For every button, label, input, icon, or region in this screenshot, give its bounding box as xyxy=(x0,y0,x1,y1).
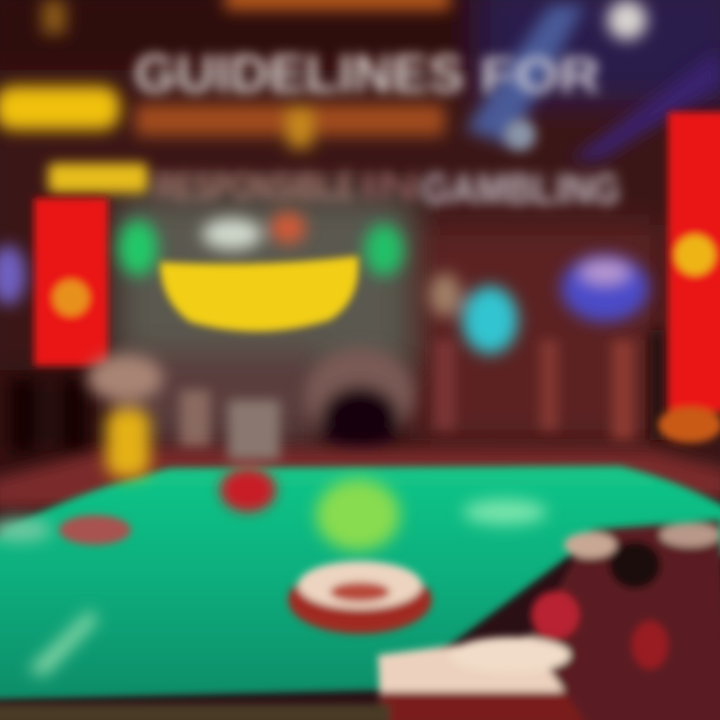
bottom front cards and chips xyxy=(0,520,720,720)
felt highlights xyxy=(0,479,547,676)
chips on felt xyxy=(59,515,432,634)
red banner left xyxy=(34,198,108,366)
subtitle text: GAMBLING xyxy=(422,165,620,214)
heading band xyxy=(135,104,445,148)
yellow label left xyxy=(0,86,120,130)
green table felt xyxy=(0,466,720,700)
title text xyxy=(134,44,600,151)
dark tunnel xyxy=(304,347,416,454)
figure and red chip xyxy=(220,400,280,512)
title text: GUIDELINES xyxy=(134,44,464,104)
central sign xyxy=(118,212,404,332)
top ceiling light strip xyxy=(42,0,720,160)
subtitle text: RESPONSIBLE xyxy=(155,165,355,209)
background wall xyxy=(0,0,720,480)
wall columns xyxy=(12,330,664,450)
title text: FOR xyxy=(480,47,600,103)
round lights on right xyxy=(429,254,649,354)
subtitle text: IN xyxy=(360,165,420,209)
red banner right xyxy=(658,112,720,443)
subtitle text xyxy=(48,163,620,214)
figure and yellow bottle xyxy=(87,354,163,478)
table rim xyxy=(0,448,720,510)
purple orb left xyxy=(0,245,26,305)
